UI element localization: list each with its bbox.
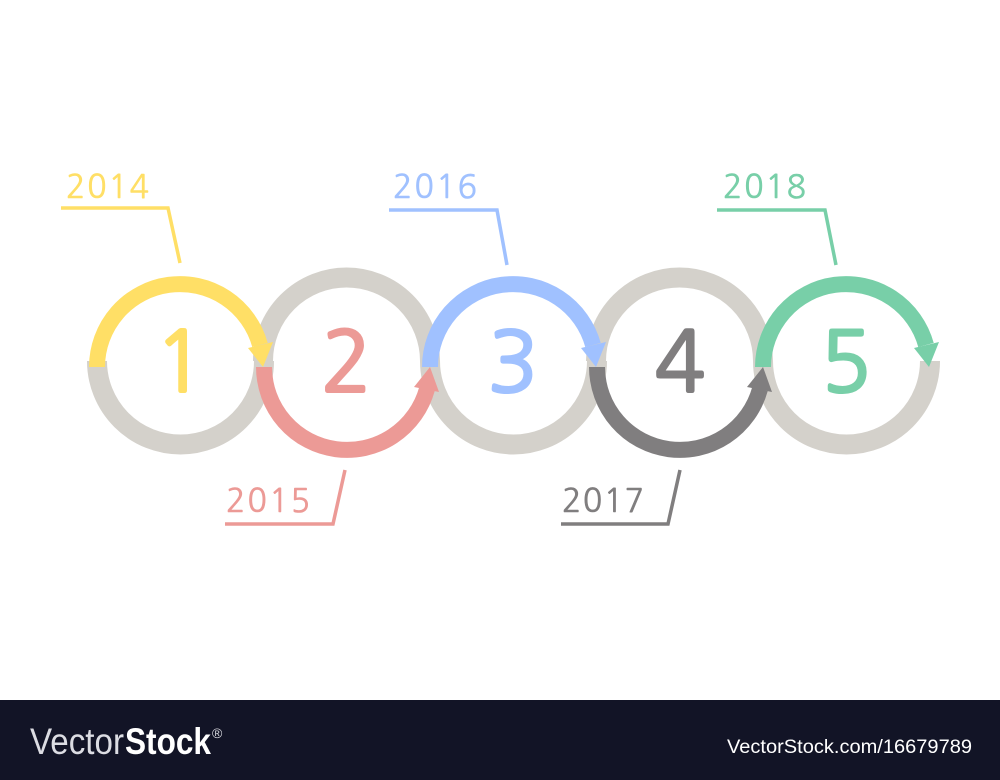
grey half ring: circle 2 top bbox=[263, 278, 430, 361]
grey half ring: circle 4 top bbox=[596, 278, 763, 361]
callout leader 2014 bbox=[61, 208, 180, 263]
label 2017: 2017 bbox=[562, 485, 644, 517]
callout leader 2018 bbox=[717, 210, 836, 265]
footer image id: VectorStock.com/16679789 bbox=[727, 737, 972, 758]
step 2: red arrow arc bbox=[264, 367, 439, 450]
label 2014: 2014 bbox=[66, 171, 149, 203]
number 4: 4 bbox=[655, 320, 705, 404]
step 1: yellow arrow arc bbox=[97, 284, 273, 367]
grey half ring: circle 5 bottom bbox=[763, 361, 930, 444]
number 3: 3 bbox=[488, 320, 538, 404]
step 4: dark grey arrow arc bbox=[597, 367, 772, 450]
label 2016: 2016 bbox=[393, 171, 477, 203]
callout leader 2016 bbox=[389, 210, 507, 265]
step 5: green arrow arc bbox=[763, 284, 939, 367]
footer logo: Vector: Vector bbox=[30, 721, 124, 762]
callout leader 2017 bbox=[561, 470, 680, 524]
step 3: blue arrow arc bbox=[430, 284, 606, 367]
footer logo: Stock: Stock bbox=[125, 721, 211, 762]
label 2018: 2018 bbox=[723, 171, 806, 203]
grey half ring: circle 3 bottom bbox=[430, 361, 597, 444]
callout leader 2015 bbox=[225, 470, 345, 524]
footer bar bbox=[0, 700, 1000, 780]
grey half ring: circle 1 bottom bbox=[97, 361, 264, 444]
label 2015: 2015 bbox=[226, 485, 310, 517]
registered mark: ® bbox=[212, 725, 223, 741]
number 5: 5 bbox=[821, 320, 871, 404]
number 2: 2 bbox=[321, 320, 372, 404]
number 1: 1 bbox=[155, 320, 205, 404]
